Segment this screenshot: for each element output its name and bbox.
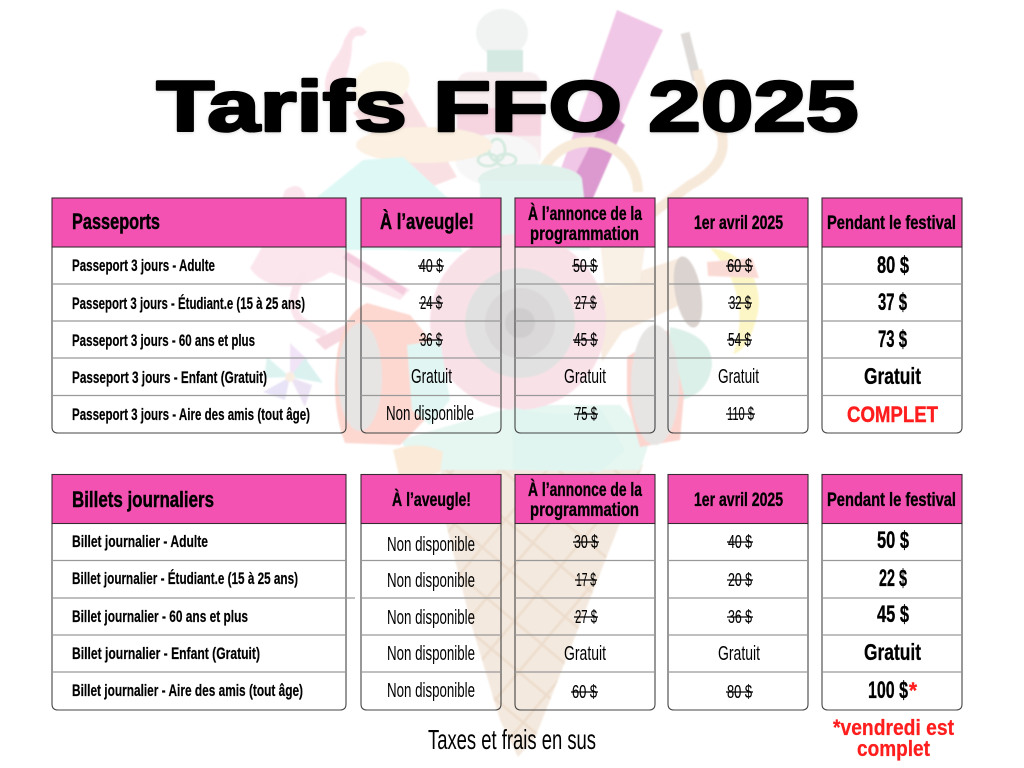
column: à l'annonce de la programmation: 30 $	[574, 531, 598, 552]
column: à l'aveugle: Non disponible	[387, 679, 475, 702]
column: pendant le festival: Gratuit	[864, 363, 921, 389]
column: 1er avril 2025: 80 $	[727, 681, 752, 702]
upper cymbal and pink wedge	[353, 80, 457, 190]
saxophone bell	[669, 254, 707, 330]
column: 1er avril 2025: 40 $	[728, 531, 752, 552]
panel: passeports table	[52, 198, 962, 433]
column: 1er avril 2025: 54 $	[728, 329, 751, 350]
column: pendant le festival: *	[909, 678, 917, 703]
column: à l'aveugle: Non disponible	[387, 533, 475, 556]
billets name column: Billets journaliers	[72, 487, 214, 512]
background illustration: ice cream cone of instruments	[250, 9, 759, 757]
column: à l'annonce de la programmation: 50 $	[573, 255, 597, 276]
column: à l'aveugle	[361, 474, 501, 710]
column: 1er avril 2025: Gratuit	[718, 642, 760, 665]
column: à l'annonce de la programmation: 27 $	[575, 292, 596, 313]
column: pendant le festival: 80 $	[877, 252, 909, 279]
column: 1er avril 2025: 60 $	[727, 255, 752, 276]
heading: passeports	[52, 198, 346, 247]
billets name column: Billet journalier - 60 ans et plus	[72, 608, 248, 626]
column: pendant le festival	[822, 474, 962, 710]
column: à l'aveugle: Non disponible	[387, 642, 475, 665]
column: à l'aveugle: À l’aveugle!	[380, 209, 474, 234]
billets name column: Billet journalier - Aire des amis (tout âge)	[72, 682, 303, 700]
column: à l'annonce de la programmation: Gratuit	[564, 365, 606, 388]
column: à l'aveugle: Non disponible	[387, 606, 475, 629]
column: 1er avril 2025: 110 $	[727, 403, 754, 424]
passeports name column: Passeport 3 jours - Étudiant.e (15 à 25 ans)	[72, 294, 305, 313]
column: à l'aveugle: 24 $	[420, 292, 442, 313]
pinwheel	[263, 343, 323, 407]
teal block	[317, 157, 462, 252]
column: 1er avril 2025: Gratuit	[718, 365, 759, 388]
right red speaker	[627, 330, 684, 447]
column: pendant le festival: 45 $	[877, 601, 909, 628]
column: pendant le festival: COMPLET	[847, 402, 938, 427]
heading: billets journaliers	[52, 474, 346, 524]
column: pendant le festival	[822, 198, 962, 433]
column: à l'annonce de la programmation: À l’annonce de la	[528, 202, 642, 225]
teal drum	[478, 164, 582, 196]
passeports name column: Passeport 3 jours - Aire des amis (tout âge)	[72, 406, 310, 424]
column: 1er avril 2025	[668, 474, 808, 710]
passeports name column: Passeports	[72, 209, 160, 234]
yellow and red crescent	[710, 248, 759, 354]
drum	[457, 72, 541, 167]
column: pendant le festival: Pendant le festival	[827, 489, 956, 511]
tambourine	[538, 142, 638, 192]
column: à l'aveugle: Non disponible	[387, 569, 475, 592]
orange drip	[393, 445, 443, 480]
column: à l'annonce de la programmation: 27 $	[575, 606, 597, 627]
column: pendant le festival: 50 $	[877, 527, 909, 554]
column: 1er avril 2025: 1er avril 2025	[694, 212, 783, 234]
passeports name column	[52, 198, 355, 433]
column: à l'annonce de la programmation: 17 $	[576, 569, 596, 590]
passeports name column: Passeport 3 jours - Adulte	[72, 257, 215, 275]
trillium logo	[478, 139, 516, 166]
column: à l'annonce de la programmation: 60 $	[572, 681, 597, 702]
column: pendant le festival: 73 $	[878, 326, 907, 353]
title: Tarifs FFO 2025	[156, 68, 858, 147]
panel: billets journaliers table	[52, 474, 962, 710]
passeports name column: Passeport 3 jours - Enfant (Gratuit)	[72, 369, 267, 387]
column: pendant le festival: Gratuit	[864, 639, 921, 665]
column: à l'aveugle: 36 $	[420, 329, 442, 350]
guitar	[548, 10, 663, 225]
note: vendredi est complet: complet	[857, 736, 931, 761]
column: 1er avril 2025: 1er avril 2025	[694, 489, 783, 511]
column: à l'aveugle	[361, 198, 501, 433]
big pink speaker	[430, 234, 606, 410]
column: pendant le festival: 100 $	[868, 677, 908, 704]
column: à l'aveugle: Gratuit	[411, 365, 452, 388]
column: 1er avril 2025: 32 $	[729, 292, 751, 313]
column: à l'annonce de la programmation: programmation	[530, 499, 639, 521]
column frame	[52, 247, 346, 433]
billets name column	[52, 474, 355, 710]
note: taxes et frais: Taxes et frais en sus	[428, 724, 596, 755]
column: 1er avril 2025: 36 $	[728, 606, 752, 627]
column: 1er avril 2025: 20 $	[728, 569, 752, 590]
column: à l'aveugle: À l’aveugle!	[392, 488, 471, 511]
passeports name column: Passeport 3 jours - 60 ans et plus	[72, 332, 255, 350]
column: pendant le festival: 22 $	[879, 565, 907, 592]
column: 1er avril 2025	[668, 198, 808, 433]
billets name column: Billet journalier - Adulte	[72, 533, 208, 551]
column: à l'annonce de la programmation: 45 $	[574, 329, 597, 350]
column: à l'annonce de la programmation: 75 $	[575, 403, 597, 424]
column: pendant le festival: Pendant le festival	[827, 212, 956, 234]
column: à l'aveugle: Non disponible	[386, 402, 474, 425]
flamingo	[325, 26, 367, 96]
note: vendredi est complet: *vendredi est	[833, 715, 955, 740]
column: à l'annonce de la programmation	[515, 474, 655, 710]
trumpet	[250, 186, 410, 300]
mint ice cream	[400, 405, 650, 470]
ice cream cone	[440, 432, 643, 757]
column: à l'annonce de la programmation	[515, 198, 655, 433]
note: vendredi est complet	[833, 715, 955, 761]
column: pendant le festival: 37 $	[878, 289, 907, 316]
billets name column: Billet journalier - Étudiant.e (15 à 25 ans)	[72, 569, 298, 588]
green blob	[668, 327, 712, 400]
billets name column: Billet journalier - Enfant (Gratuit)	[72, 645, 260, 663]
microphone	[476, 9, 528, 57]
column: à l'annonce de la programmation: Gratuit	[564, 642, 606, 665]
left red speaker	[335, 303, 432, 445]
column: à l'aveugle: 40 $	[419, 255, 443, 276]
column: à l'annonce de la programmation: programmation	[530, 223, 639, 245]
lower cymbal	[356, 127, 492, 163]
column: à l'annonce de la programmation: À l’annonce de la	[528, 478, 642, 501]
saxophone	[685, 33, 697, 80]
